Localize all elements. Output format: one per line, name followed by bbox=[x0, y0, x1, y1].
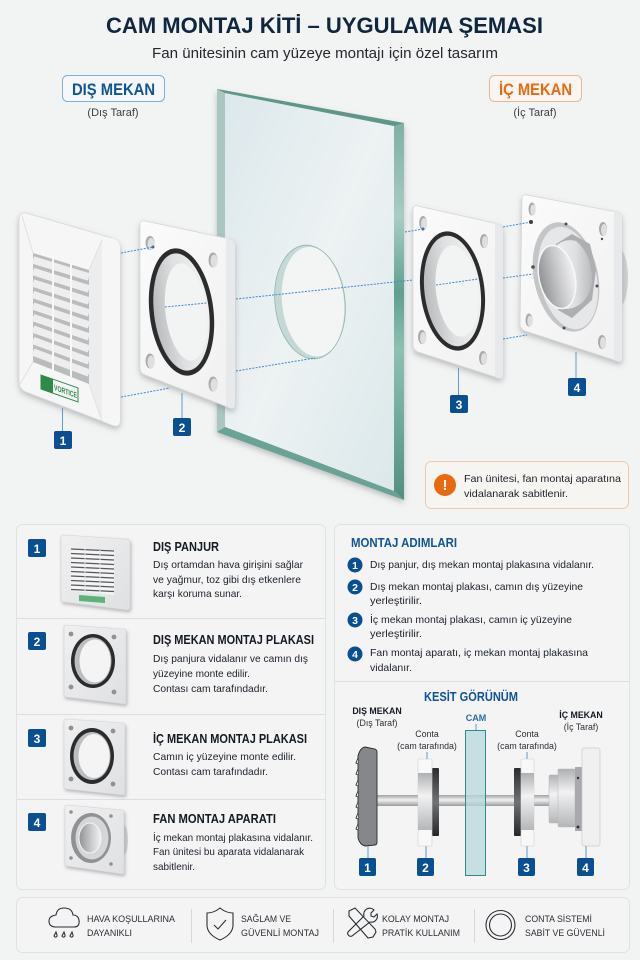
note box: ! bbox=[442, 477, 448, 494]
vortice logo: VORTICE bbox=[54, 383, 77, 400]
part row 4: sabitlenir. bbox=[153, 861, 195, 873]
feature: weather: HAVA KOŞULLARINA bbox=[87, 914, 176, 925]
step 2: 2 bbox=[352, 582, 358, 594]
feature: shield: GÜVENLİ MONTAJ bbox=[241, 928, 319, 939]
icon: shield bbox=[207, 908, 233, 940]
step 4: 4 bbox=[352, 649, 358, 661]
part row 1: 1 bbox=[34, 542, 41, 556]
part row 1 bbox=[28, 535, 303, 610]
step 4 bbox=[348, 646, 588, 674]
rod bbox=[376, 795, 551, 806]
part row 4: FAN MONTAJ APARATI bbox=[153, 812, 276, 826]
glass hole bbox=[269, 242, 351, 362]
part row 2: yüzeyine monte edilir. bbox=[153, 668, 250, 680]
part row 3: Camın iç yüzeyine monte edilir. bbox=[153, 751, 296, 763]
label: iç mekan: (İç Taraf) bbox=[513, 106, 557, 119]
glass pane bbox=[217, 89, 404, 500]
part row 1: ve yağmur, toz gibi dış etkenlere bbox=[153, 574, 301, 586]
icon: crossed tools bbox=[348, 908, 377, 938]
glass section bbox=[466, 730, 486, 876]
step 3: 3 bbox=[352, 615, 358, 627]
feature: gasket: CONTA SİSTEMİ bbox=[525, 914, 592, 925]
part row 1: karşı koruma sunar. bbox=[153, 588, 242, 600]
badge 1: 1 bbox=[60, 434, 67, 448]
step 2: Dış mekan montaj plakası, camın dış yüzeyine bbox=[370, 581, 583, 593]
section badge 3 bbox=[518, 858, 535, 876]
section badge 2: 2 bbox=[422, 861, 429, 875]
part row 1: DIŞ PANJUR bbox=[153, 540, 219, 554]
label: dış mekan: (Dış Taraf) bbox=[87, 107, 139, 119]
step 3: yerleştirilir. bbox=[370, 628, 422, 640]
feature: tools: PRATİK KULLANIM bbox=[382, 928, 460, 939]
fan bracket section bbox=[549, 748, 600, 846]
section badge 4: 4 bbox=[582, 861, 589, 875]
section badge 4 bbox=[577, 858, 594, 876]
badge 4: 4 bbox=[574, 381, 581, 395]
part row 4: Fan ünitesi bu aparata vidalanarak bbox=[153, 846, 305, 858]
dotted axis lines bbox=[121, 220, 533, 397]
feature: tools: KOLAY MONTAJ bbox=[382, 914, 449, 925]
step 3 bbox=[348, 612, 572, 640]
thumbnail outer plate bbox=[64, 625, 126, 704]
step 1: 1 bbox=[352, 560, 358, 572]
exploded part 2: outer mounting plate bbox=[140, 221, 235, 408]
feature: gasket: SABİT VE GÜVENLİ bbox=[525, 928, 605, 939]
plate 3 section bbox=[514, 759, 534, 846]
feature: weather: DAYANIKLI bbox=[87, 928, 132, 939]
part row 3: Contası cam tarafındadır. bbox=[153, 766, 268, 778]
panel: parts list bbox=[16, 524, 326, 890]
part row 3: İÇ MEKAN MONTAJ PLAKASI bbox=[153, 731, 307, 746]
exploded part 4: fan mounting bracket bbox=[520, 195, 628, 362]
heading: montaj adımları: MONTAJ ADIMLARI bbox=[351, 536, 457, 550]
note box: Fan ünitesi, fan montaj aparatına bbox=[464, 473, 621, 485]
subtitle: Fan ünitesinin cam yüzeye montajı için özel tasarım bbox=[152, 46, 498, 62]
part row 2: Dış panjura vidalanır ve camın dış bbox=[153, 653, 308, 665]
louver section bbox=[356, 747, 377, 846]
feature: weather bbox=[49, 908, 176, 939]
part row 1: Dış ortamdan hava girişini sağlar bbox=[153, 559, 303, 571]
section labels: Conta bbox=[515, 729, 539, 739]
section badge 1: 1 bbox=[364, 861, 371, 875]
badge 4 bbox=[568, 378, 586, 396]
panel: feature strip bbox=[16, 898, 630, 952]
section labels: (İç Taraf) bbox=[564, 722, 598, 732]
feature: gasket bbox=[486, 910, 605, 940]
label: iç mekan bbox=[490, 76, 582, 119]
section labels: (Dış Taraf) bbox=[357, 718, 398, 728]
panel: assembly steps and section view bbox=[334, 524, 630, 890]
icon: ring bbox=[486, 910, 515, 940]
thumbnail louver bbox=[61, 535, 130, 610]
badge 3 bbox=[450, 395, 468, 413]
label: iç mekan: İÇ MEKAN bbox=[499, 81, 572, 99]
heading: kesit görünüm: KESİT GÖRÜNÜM bbox=[424, 689, 518, 704]
section badge 3: 3 bbox=[523, 861, 530, 875]
fan tube bbox=[552, 240, 592, 309]
feature: shield bbox=[207, 908, 319, 940]
badge 1 bbox=[54, 431, 72, 449]
thumbnail fan bracket bbox=[65, 805, 128, 874]
feature: tools bbox=[348, 908, 460, 939]
step 2: yerleştirilir. bbox=[370, 595, 422, 607]
thumbnail inner plate bbox=[64, 719, 125, 795]
plate 2 section bbox=[418, 759, 439, 846]
note box bbox=[426, 462, 628, 508]
section labels: (cam tarafında) bbox=[397, 741, 457, 751]
label: dış mekan bbox=[62, 76, 164, 119]
feature: shield: SAĞLAM VE bbox=[241, 914, 291, 925]
exploded part 1: outer louver bbox=[19, 213, 120, 426]
exploded part 3: inner mounting plate bbox=[413, 206, 503, 378]
step 4: Fan montaj aparatı, iç mekan montaj plakasına bbox=[370, 647, 588, 659]
section connectors bbox=[368, 724, 586, 858]
badge 2 bbox=[173, 418, 191, 436]
section badge 1 bbox=[359, 858, 376, 876]
part row 3: 3 bbox=[34, 732, 41, 746]
section labels: DIŞ MEKAN bbox=[352, 706, 402, 716]
section labels: (cam tarafında) bbox=[497, 741, 557, 751]
section labels bbox=[352, 706, 603, 751]
part row 4 bbox=[28, 805, 313, 874]
callouts on exploded view bbox=[54, 352, 586, 449]
vortice logo bbox=[41, 375, 78, 402]
section labels: CAM bbox=[466, 713, 486, 723]
badge 3: 3 bbox=[456, 398, 463, 412]
part row 2 bbox=[28, 625, 314, 704]
part row 2: Contası cam tarafındadır. bbox=[153, 683, 268, 695]
section labels: Conta bbox=[415, 729, 439, 739]
part row 2: DIŞ MEKAN MONTAJ PLAKASI bbox=[153, 633, 314, 647]
icon: cloud with rain bbox=[49, 908, 79, 937]
badge 2: 2 bbox=[179, 421, 186, 435]
section badge 2 bbox=[417, 858, 434, 876]
title: CAM MONTAJ KİTİ – UYGULAMA ŞEMASI bbox=[106, 13, 543, 38]
section diagram bbox=[352, 706, 603, 876]
note box: vidalanarak sabitlenir. bbox=[464, 488, 568, 500]
fan bowl bbox=[523, 216, 609, 338]
part row 3 bbox=[28, 719, 307, 795]
step 1: Dış panjur, dış mekan montaj plakasına vidalanır. bbox=[370, 559, 594, 571]
label: dış mekan: DIŞ MEKAN bbox=[72, 81, 155, 99]
section labels: İÇ MEKAN bbox=[559, 710, 603, 720]
step 4: vidalanır. bbox=[370, 662, 412, 674]
part row 4: 4 bbox=[34, 816, 41, 830]
part row 2: 2 bbox=[34, 635, 41, 649]
step 2 bbox=[348, 580, 583, 607]
part row 4: İç mekan montaj plakasına vidalanır. bbox=[153, 831, 313, 844]
step 3: İç mekan montaj plakası, camın iç yüzeyine bbox=[370, 613, 572, 626]
